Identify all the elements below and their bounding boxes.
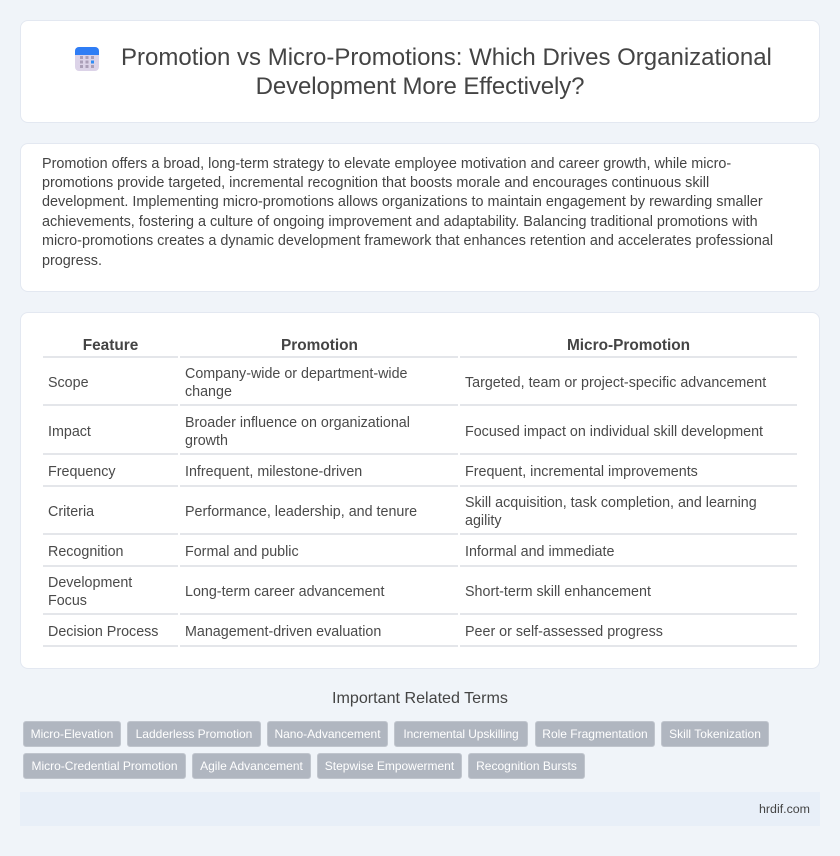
comparison table bbox=[43, 337, 797, 647]
footer site name: hrdif.com bbox=[759, 802, 810, 816]
comparison table: Formal and public bbox=[185, 544, 299, 560]
tag: Stepwise Empowerment bbox=[325, 759, 454, 773]
tag: Nano-Advancement bbox=[274, 727, 381, 741]
intro text: micro-promotions creates a dynamic development framework that enhances retention and accelerates professional bbox=[42, 233, 773, 249]
comparison table: Skill acquisition, task completion, and learning bbox=[465, 494, 757, 510]
header card bbox=[20, 20, 820, 123]
footer bar bbox=[20, 792, 820, 826]
tag: Micro-Elevation bbox=[31, 727, 113, 741]
comparison table: Management-driven evaluation bbox=[185, 624, 381, 640]
tag bbox=[468, 753, 585, 779]
intro text: achievements, fostering a culture of ongoing improvement and adaptability. Balancing traditional promotions with bbox=[42, 214, 758, 230]
related terms heading: Important Related Terms bbox=[332, 689, 508, 707]
tag bbox=[394, 721, 528, 747]
comparison table: Company-wide or department-wide bbox=[185, 366, 408, 382]
tag bbox=[23, 721, 121, 747]
title: Development More Effectively? bbox=[256, 73, 584, 100]
tag: Micro-Credential Promotion bbox=[31, 759, 178, 773]
comparison table: Focused impact on individual skill development bbox=[465, 424, 763, 440]
tag: Agile Advancement bbox=[200, 759, 303, 773]
tag bbox=[192, 753, 311, 779]
row: development focus bbox=[48, 574, 132, 608]
tag: Recognition Bursts bbox=[476, 759, 577, 773]
tag bbox=[127, 721, 261, 747]
comparison table: agility bbox=[465, 512, 502, 528]
tag bbox=[535, 721, 655, 747]
comparison table: Long-term career advancement bbox=[185, 584, 384, 600]
tag bbox=[661, 721, 769, 747]
tag bbox=[23, 753, 186, 779]
comparison table: Short-term skill enhancement bbox=[465, 584, 651, 600]
row: frequency: Frequency bbox=[48, 464, 116, 480]
comparison table: Broader influence on organizational bbox=[185, 414, 410, 430]
comparison table: change bbox=[185, 384, 232, 400]
tag bbox=[267, 721, 388, 747]
row: development focus: Development bbox=[48, 574, 132, 590]
comparison table panel bbox=[20, 312, 820, 669]
tag bbox=[317, 753, 462, 779]
header: promotion: Promotion bbox=[281, 337, 358, 354]
comparison table: Performance, leadership, and tenure bbox=[185, 504, 417, 520]
intro text: development. Implementing micro-promotions allows organizations to maintain engagement by rewarding smaller bbox=[42, 194, 763, 210]
tag: Skill Tokenization bbox=[669, 727, 761, 741]
header: micro-promotion: Micro-Promotion bbox=[567, 337, 690, 354]
comparison table: Infrequent, milestone-driven bbox=[185, 464, 362, 480]
intro text bbox=[42, 156, 773, 269]
comparison table: growth bbox=[185, 432, 228, 448]
header: feature: Feature bbox=[83, 337, 138, 354]
row: impact: Impact bbox=[48, 424, 91, 440]
intro text: promotions provide targeted, incremental recognition that boosts morale and encourages continuous skill bbox=[42, 175, 709, 191]
row: criteria: Criteria bbox=[48, 504, 94, 520]
comparison table: Peer or self-assessed progress bbox=[465, 624, 663, 640]
tag: Incremental Upskilling bbox=[403, 727, 519, 741]
comparison table: Frequent, incremental improvements bbox=[465, 464, 698, 480]
title: Promotion vs Micro-Promotions: Which Drives Organizational bbox=[121, 44, 772, 71]
icon: calendar bbox=[75, 47, 99, 71]
intro text: progress. bbox=[42, 253, 102, 269]
intro panel bbox=[20, 143, 820, 292]
row: decision process: Decision Process bbox=[48, 624, 158, 640]
intro text: Promotion offers a broad, long-term strategy to elevate employee motivation and career growth, while micro- bbox=[42, 156, 731, 172]
comparison table: Targeted, team or project-specific advancement bbox=[465, 374, 766, 390]
comparison table: Informal and immediate bbox=[465, 544, 614, 560]
row: scope: Scope bbox=[48, 374, 89, 390]
tag: Role Fragmentation bbox=[542, 727, 648, 741]
tag: Ladderless Promotion bbox=[136, 727, 252, 741]
row: development focus: Focus bbox=[48, 592, 87, 608]
row: recognition: Recognition bbox=[48, 544, 124, 560]
title bbox=[121, 44, 772, 100]
related terms tags bbox=[23, 721, 769, 779]
